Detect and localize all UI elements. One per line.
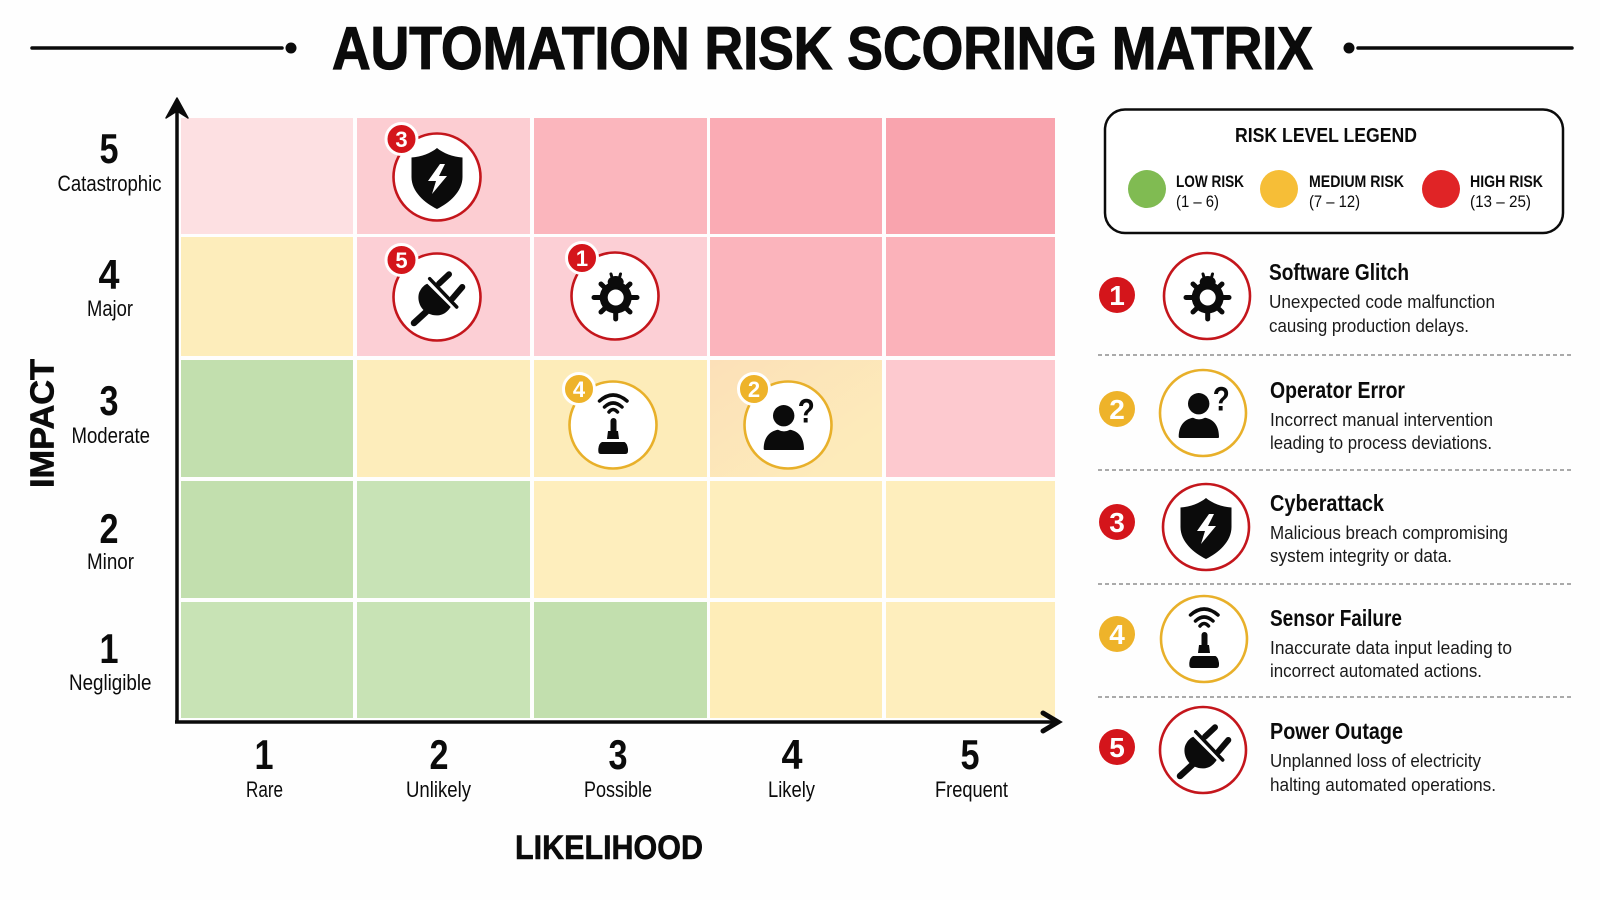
likelihood 5: Frequent	[935, 777, 1008, 802]
row: impact 2 cells	[181, 481, 1055, 598]
likelihood 1	[246, 731, 283, 802]
likelihood 2: 2	[430, 731, 448, 778]
impact 4: 4	[98, 251, 120, 298]
impact 5	[58, 125, 162, 196]
badge 3: 3	[1109, 507, 1125, 538]
impact 5: 5	[100, 125, 118, 172]
badge 5: 5	[1109, 732, 1125, 763]
marker 3: cyberattack: 3	[395, 127, 408, 152]
entry text: leading to process deviations.	[1270, 432, 1492, 453]
impact 1	[69, 625, 152, 695]
risk entry 5: power outage	[1099, 707, 1496, 795]
impact scale labels	[58, 125, 162, 695]
legend item: high risk: HIGH RISK	[1470, 172, 1544, 191]
arrow: impact axis	[166, 98, 188, 724]
legend item: high risk	[1422, 170, 1544, 211]
likelihood 1: Rare	[246, 777, 283, 802]
row: impact 3 cells	[181, 360, 1055, 477]
marker 2: operator error: 2	[748, 377, 760, 402]
impact 1: Negligible	[69, 670, 152, 695]
impact 1: 1	[100, 625, 118, 672]
icon: wireless sensor	[1161, 596, 1247, 682]
panel: risk level legend	[1105, 110, 1563, 233]
icon: shield with bolt	[1163, 484, 1249, 570]
entry text: Software Glitch	[1269, 259, 1409, 285]
legend item: low risk: (1 – 6)	[1176, 192, 1219, 211]
row: impact 5 cells	[181, 118, 1055, 234]
entry text	[1270, 490, 1508, 566]
legend item: medium risk	[1260, 170, 1405, 211]
likelihood 3	[584, 731, 652, 802]
risk entry 4: sensor failure	[1099, 596, 1512, 682]
impact 3: Moderate	[72, 423, 150, 448]
badge 2: 2	[1109, 394, 1125, 425]
legend item: high risk: (13 – 25)	[1470, 192, 1531, 211]
badge 4: 4	[1109, 619, 1125, 650]
axis title: likelihood: LIKELIHOOD	[515, 829, 703, 867]
impact 3: 3	[100, 377, 118, 424]
likelihood scale labels	[246, 731, 1008, 802]
entry text: Power Outage	[1270, 718, 1403, 744]
entry text: Operator Error	[1270, 377, 1405, 403]
entry text: Sensor Failure	[1270, 605, 1402, 631]
entry text: Cyberattack	[1270, 490, 1384, 516]
likelihood 3: 3	[608, 731, 628, 778]
row: impact 1 cells	[181, 602, 1055, 718]
title rule left	[32, 42, 296, 54]
marker 2: operator error	[738, 374, 832, 468]
likelihood 4: 4	[782, 731, 803, 778]
entry text: Incorrect manual intervention	[1270, 409, 1493, 430]
entry text	[1270, 718, 1496, 795]
entry text: causing production delays.	[1269, 315, 1469, 336]
likelihood 4: Likely	[768, 777, 815, 802]
badge 1: 1	[1109, 280, 1125, 311]
panel: risk matrix heat map	[181, 118, 1055, 718]
axis title: impact: IMPACT	[24, 358, 62, 488]
icon: bug gear	[1164, 253, 1250, 339]
title rule right	[1344, 42, 1572, 54]
entry text	[1270, 605, 1512, 681]
badge 1	[1099, 277, 1135, 313]
icon: person with question mark	[1160, 370, 1246, 456]
legend item: medium risk: MEDIUM RISK	[1309, 172, 1405, 191]
impact 2: 2	[100, 505, 118, 552]
legend item: low risk	[1128, 170, 1245, 211]
entry text	[1269, 259, 1495, 336]
marker 4: sensor failure	[564, 374, 656, 468]
badge 4	[1099, 616, 1135, 652]
badge 5	[1099, 729, 1135, 765]
arrow: likelihood axis	[175, 713, 1058, 731]
risk entry 3: cyberattack	[1099, 484, 1508, 570]
impact 4: Major	[87, 296, 133, 321]
entry text: halting automated operations.	[1270, 774, 1496, 795]
marker 5: power outage	[386, 244, 480, 340]
marker 3: cyberattack	[386, 124, 480, 220]
entry text: incorrect automated actions.	[1270, 660, 1482, 681]
row: impact 4 cells	[181, 237, 1055, 356]
likelihood 5: 5	[960, 731, 980, 778]
likelihood 3: Possible	[584, 777, 652, 802]
marker 1: software glitch: 1	[576, 246, 588, 271]
badge 2	[1099, 391, 1135, 427]
likelihood 1: 1	[254, 731, 274, 778]
entry text: Inaccurate data input leading to	[1270, 637, 1512, 658]
entry text: Unexpected code malfunction	[1269, 291, 1495, 312]
title: AUTOMATION RISK SCORING MATRIX	[332, 14, 1313, 82]
likelihood 5	[935, 731, 1008, 802]
impact 2: Minor	[87, 549, 134, 574]
legend heading: RISK LEVEL LEGEND	[1235, 124, 1417, 147]
likelihood 2: Unlikely	[406, 777, 471, 802]
legend item: medium risk: (7 – 12)	[1309, 192, 1360, 211]
marker 1: software glitch	[566, 242, 658, 340]
impact 3	[72, 377, 150, 448]
entry text: system integrity or data.	[1270, 545, 1452, 566]
icon: unplugged plug	[1160, 707, 1246, 793]
likelihood 4	[768, 731, 815, 802]
impact 4	[87, 251, 133, 321]
entry text	[1270, 377, 1493, 453]
likelihood 2	[406, 731, 471, 802]
impact 2	[87, 505, 134, 574]
risk entry 1: software glitch	[1099, 253, 1495, 339]
risk entry 2: operator error	[1099, 370, 1493, 456]
entry text: Unplanned loss of electricity	[1270, 750, 1482, 771]
badge 3	[1099, 504, 1135, 540]
impact 5: Catastrophic	[58, 171, 162, 196]
entry text: Malicious breach compromising	[1270, 522, 1508, 543]
marker 4: sensor failure: 4	[573, 377, 586, 402]
marker 5: power outage: 5	[395, 248, 408, 273]
legend item: low risk: LOW RISK	[1176, 172, 1245, 191]
